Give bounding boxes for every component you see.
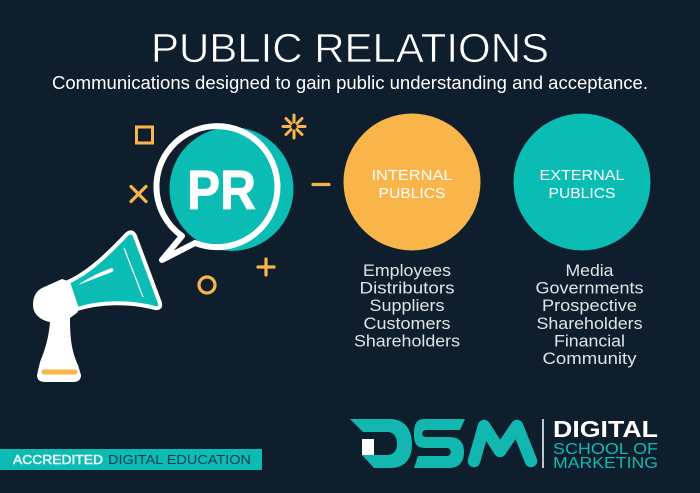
banner: accredited digital education: DIGITAL EDUCATION bbox=[108, 452, 251, 467]
icon: square bbox=[136, 127, 152, 143]
icon: plus bbox=[258, 259, 274, 275]
list: external publics: Shareholders bbox=[536, 315, 642, 333]
list: external publics: Prospective bbox=[542, 297, 637, 315]
circle: internal publics bbox=[344, 114, 480, 250]
list: internal publics: Suppliers bbox=[370, 297, 444, 315]
icon: ring bbox=[199, 277, 215, 293]
circle: internal publics: PUBLICS bbox=[378, 186, 446, 202]
logo text: MARKETING bbox=[553, 455, 658, 472]
icon: cross bbox=[131, 186, 146, 202]
list: external publics: Governments bbox=[536, 280, 644, 298]
list: internal publics: Employees bbox=[363, 262, 451, 280]
list: external publics bbox=[536, 262, 644, 368]
circle: external publics: EXTERNAL bbox=[540, 168, 624, 184]
list: internal publics: Shareholders bbox=[354, 332, 460, 350]
banner: accredited digital education: ACCREDITED bbox=[13, 452, 103, 467]
logo text bbox=[553, 416, 658, 472]
list: internal publics: Customers bbox=[364, 315, 450, 333]
list: internal publics bbox=[354, 262, 460, 350]
list: external publics: Financial bbox=[554, 332, 625, 350]
logo text: DIGITAL bbox=[553, 416, 658, 442]
list: internal publics: Distributors bbox=[360, 280, 454, 298]
icon: speech bubble with PR: PR bbox=[187, 158, 256, 221]
logo text: SCHOOL OF bbox=[553, 441, 658, 458]
list: external publics: Community bbox=[542, 350, 637, 368]
circle: external publics bbox=[514, 114, 650, 250]
icon: megaphone bbox=[33, 232, 160, 382]
circle: external publics: PUBLICS bbox=[548, 186, 616, 202]
subtitle: Communications designed to gain public understanding and acceptance. bbox=[52, 73, 648, 93]
circle: internal publics: INTERNAL bbox=[372, 168, 452, 184]
icon: dash bbox=[313, 183, 329, 186]
title: PUBLIC RELATIONS bbox=[151, 25, 549, 71]
list: external publics: Media bbox=[566, 262, 614, 280]
icon: speech bubble with PR bbox=[156, 126, 294, 260]
banner: accredited digital education bbox=[0, 449, 262, 470]
logo divider bbox=[542, 419, 544, 468]
logo: DSM bbox=[350, 419, 531, 468]
icon: burst bbox=[283, 115, 305, 138]
